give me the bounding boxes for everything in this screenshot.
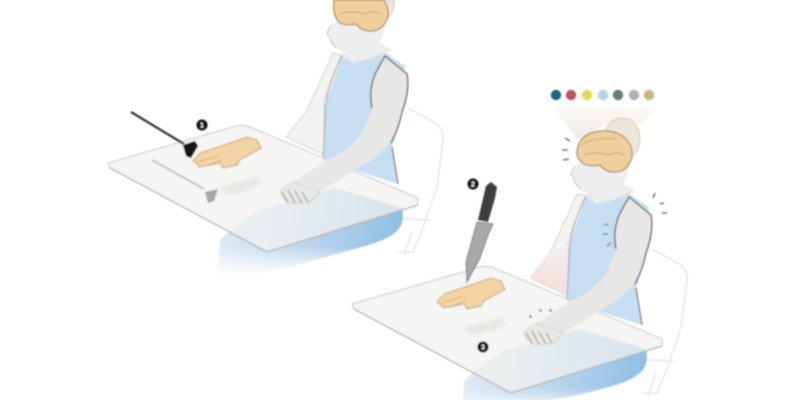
near arm and hand: figure 2 xyxy=(524,197,652,345)
figure 1: seated woman, brush strokes rubber hand xyxy=(108,0,443,276)
bun: figure 1 xyxy=(384,0,394,20)
brain: figure 2 xyxy=(577,131,632,172)
legs: figure 2 xyxy=(463,329,647,400)
figure 2: seated woman, knife threatens rubber hand xyxy=(352,90,687,400)
icon: kitchen knife xyxy=(466,182,497,282)
near arm and hand: figure 1 xyxy=(280,56,408,204)
far arm: figure 2 xyxy=(530,194,586,296)
number marker 3 xyxy=(478,342,488,352)
pink forearm: figure 2 xyxy=(530,246,568,296)
icon: paintbrush xyxy=(131,112,198,158)
brain: figure 1 xyxy=(334,0,388,31)
light cone from colour dots to head xyxy=(553,108,657,140)
number marker 1 xyxy=(196,120,208,130)
far arm: figure 1 xyxy=(286,53,342,155)
torso: figure 2 xyxy=(567,193,649,325)
torso: figure 1 xyxy=(323,52,405,184)
ghost hand under the table: figure 1 xyxy=(222,176,262,194)
reaction marks on chest xyxy=(603,224,611,246)
reaction marks around head xyxy=(562,138,570,160)
number marker 1: 1 xyxy=(200,122,204,130)
chair: figure 1 xyxy=(398,108,443,255)
reaction marks on hand xyxy=(530,310,551,317)
number marker 3: 3 xyxy=(481,344,485,352)
legs: figure 1 xyxy=(218,188,403,276)
neck and face: figure 2 xyxy=(571,159,636,203)
ghost hand under the table: figure 2 xyxy=(466,317,506,335)
chair: figure 2 xyxy=(642,249,687,396)
number marker 2 xyxy=(468,178,478,190)
number marker 2: 2 xyxy=(471,182,475,188)
table top: figure 2 xyxy=(352,266,662,393)
hidden brush shadow on table xyxy=(152,160,218,203)
colour dots row xyxy=(551,90,654,100)
rubber hand: figure 1 xyxy=(193,137,261,168)
bun: figure 2 xyxy=(604,118,640,160)
table top: figure 1 xyxy=(108,125,418,252)
reaction marks at shoulder xyxy=(653,193,667,213)
rubber hand: figure 2 xyxy=(437,278,505,309)
neck and face: figure 1 xyxy=(327,18,392,62)
